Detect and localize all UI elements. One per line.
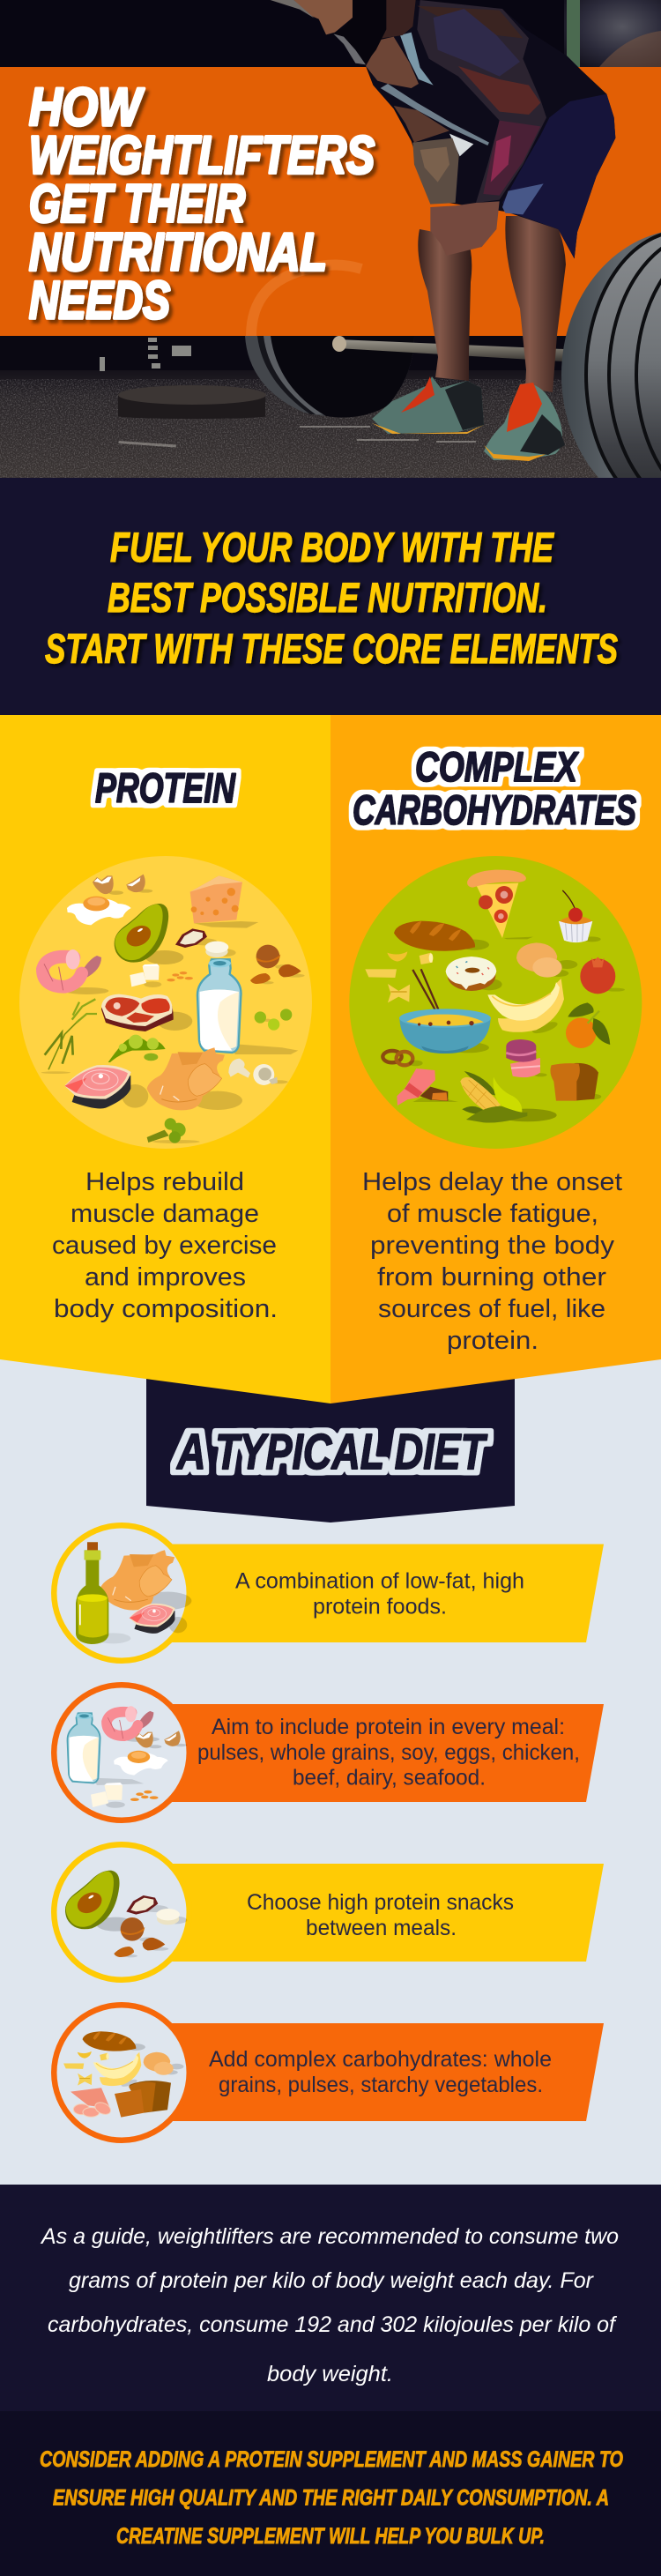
beard: [333, 0, 386, 65]
lifter legs: [418, 216, 566, 392]
carbohydrate description: of muscle fatigue,: [387, 1200, 598, 1228]
barbell bar: [332, 336, 564, 361]
face: [293, 0, 353, 34]
left forearm: [412, 138, 459, 205]
row 3 text: [247, 1890, 514, 1940]
hero photo: weightlifter and barbell: [0, 0, 661, 520]
carbohydrate foods illustration: [349, 856, 642, 1149]
diet row 3: [51, 1842, 604, 1983]
hero title: NUTRITIONAL: [29, 222, 327, 282]
carbohydrate description: sources of fuel, like: [378, 1295, 605, 1323]
diet row 1: [51, 1523, 604, 1664]
supplement text: [40, 2447, 623, 2549]
banner: a typical diet: [146, 1366, 515, 1523]
left chest skin: [366, 37, 419, 88]
hero title: WEIGHTLIFTERS: [29, 125, 375, 185]
left barbell plates: [245, 336, 414, 418]
row 2 text: [197, 1715, 580, 1790]
row 4 text: [209, 2047, 552, 2097]
guide text: grams of protein per kilo of body weight each day. For: [69, 2268, 595, 2293]
hero title: NEEDS: [29, 271, 170, 330]
panel: guide: [0, 2185, 661, 2411]
supplement text: CREATINE SUPPLEMENT WILL HELP YOU BULK UP.: [116, 2524, 545, 2549]
row 2 text: pulses, whole grains, soy, eggs, chicken,: [197, 1740, 580, 1765]
shorts: [502, 94, 615, 258]
neck: [382, 0, 416, 38]
carbohydrate description: [362, 1168, 622, 1355]
hero title: HOW: [29, 78, 145, 137]
heading: a typical diet: A TYPICAL DIET: [175, 1424, 487, 1480]
carbohydrate description: Helps delay the onset: [362, 1168, 622, 1196]
shoes: [372, 376, 565, 461]
row 1 text: protein foods.: [313, 1594, 447, 1619]
heading: complex carbohydrates: [353, 743, 636, 833]
torso and shorts silhouette: [366, 0, 615, 258]
flat plate on the floor: [118, 385, 266, 419]
heading: complex carbohydrates: COMPLEX: [415, 743, 579, 790]
panel: protein: [0, 715, 330, 1403]
panel: complex carbohydrates: [330, 715, 661, 1403]
orange title band: [0, 67, 661, 336]
hero title: GET THEIR: [29, 175, 245, 233]
row 4 text: grains, pulses, starchy vegetables.: [219, 2073, 543, 2097]
row 3 text: between meals.: [306, 1916, 457, 1940]
carbohydrate description: protein.: [447, 1327, 538, 1355]
big tattooed arm: [417, 0, 546, 203]
protein description: [52, 1168, 278, 1323]
protein description: Helps rebuild: [85, 1168, 244, 1196]
row 3 text: Choose high protein snacks: [247, 1890, 514, 1915]
row 4 text: Add complex carbohydrates: whole: [209, 2047, 552, 2072]
tank strap: [400, 33, 434, 86]
row 2 text: Aim to include protein in every meal:: [212, 1715, 565, 1739]
right barbell plate: [561, 229, 661, 520]
protein description: and improves: [85, 1263, 246, 1292]
diet row 4: [51, 2002, 604, 2143]
chalk on the floor: [119, 426, 476, 448]
carbohydrate description: from burning other: [377, 1263, 606, 1292]
hero title: [29, 78, 375, 330]
protein foods illustration: [19, 856, 312, 1149]
intro heading: [45, 524, 618, 672]
row 1 text: A combination of low-fat, high: [235, 1569, 524, 1594]
protein description: caused by exercise: [52, 1232, 277, 1260]
icon: milk, shrimp, eggs, tofu, lentils: [67, 1706, 187, 1808]
gym background: [100, 338, 191, 371]
icon: bread, pasta, banana, potato: [63, 2031, 183, 2118]
lifter upper body: [271, 0, 615, 258]
guide text: body weight.: [267, 2362, 393, 2386]
carbohydrate description: preventing the body: [370, 1232, 615, 1260]
icon: oil, chicken and salmon: [76, 1542, 191, 1644]
heading: protein: PROTEIN: [95, 764, 236, 811]
protein description: body composition.: [54, 1295, 278, 1323]
navy intro section: [0, 478, 661, 715]
hands: [430, 201, 500, 256]
row 1 text: [235, 1569, 524, 1619]
guide text: carbohydrates, consume 192 and 302 kilojoules per kilo of: [48, 2312, 618, 2337]
guide text: As a guide, weightlifters are recommended to consume two: [40, 2224, 619, 2249]
icon: avocado and nuts: [65, 1871, 187, 1957]
guide text: [40, 2224, 619, 2386]
gray tank hem: [381, 84, 489, 145]
diet row 2: [51, 1682, 604, 1823]
row 2 text: beef, dairy, seafood.: [293, 1765, 486, 1790]
belly skin: [394, 106, 449, 143]
panel: supplement advice: [0, 2411, 661, 2576]
protein description: muscle damage: [71, 1200, 259, 1228]
